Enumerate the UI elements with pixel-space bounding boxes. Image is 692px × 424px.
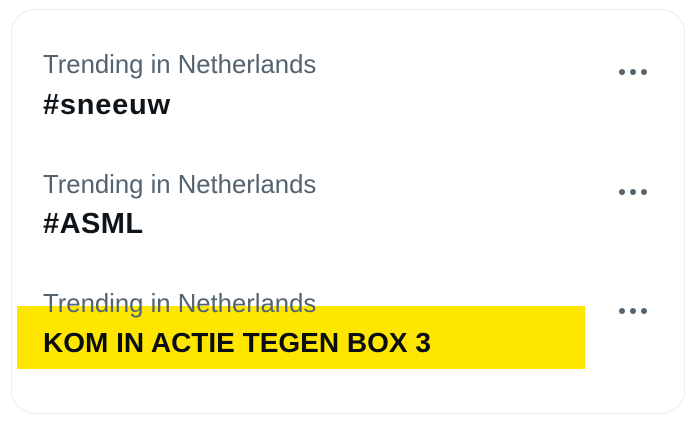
text: trend 2 location: Trending in Netherlands xyxy=(43,171,316,199)
heading: trend 1 hashtag: #sneeuw xyxy=(43,89,171,121)
text: trend 3 location: Trending in Netherlands xyxy=(43,290,316,318)
highlight: yellow bar xyxy=(17,306,585,369)
icon: trend 3 more menu xyxy=(619,308,647,314)
text: trend 1 location: Trending in Netherlands xyxy=(43,51,316,79)
heading: trend 3 highlighted title: KOM IN ACTIE TEGEN BOX 3 xyxy=(43,327,431,358)
heading: trend 2 hashtag: #ASML xyxy=(43,208,144,240)
icon: trend 2 more menu xyxy=(619,189,647,195)
icon: trend 1 more menu xyxy=(619,69,647,75)
